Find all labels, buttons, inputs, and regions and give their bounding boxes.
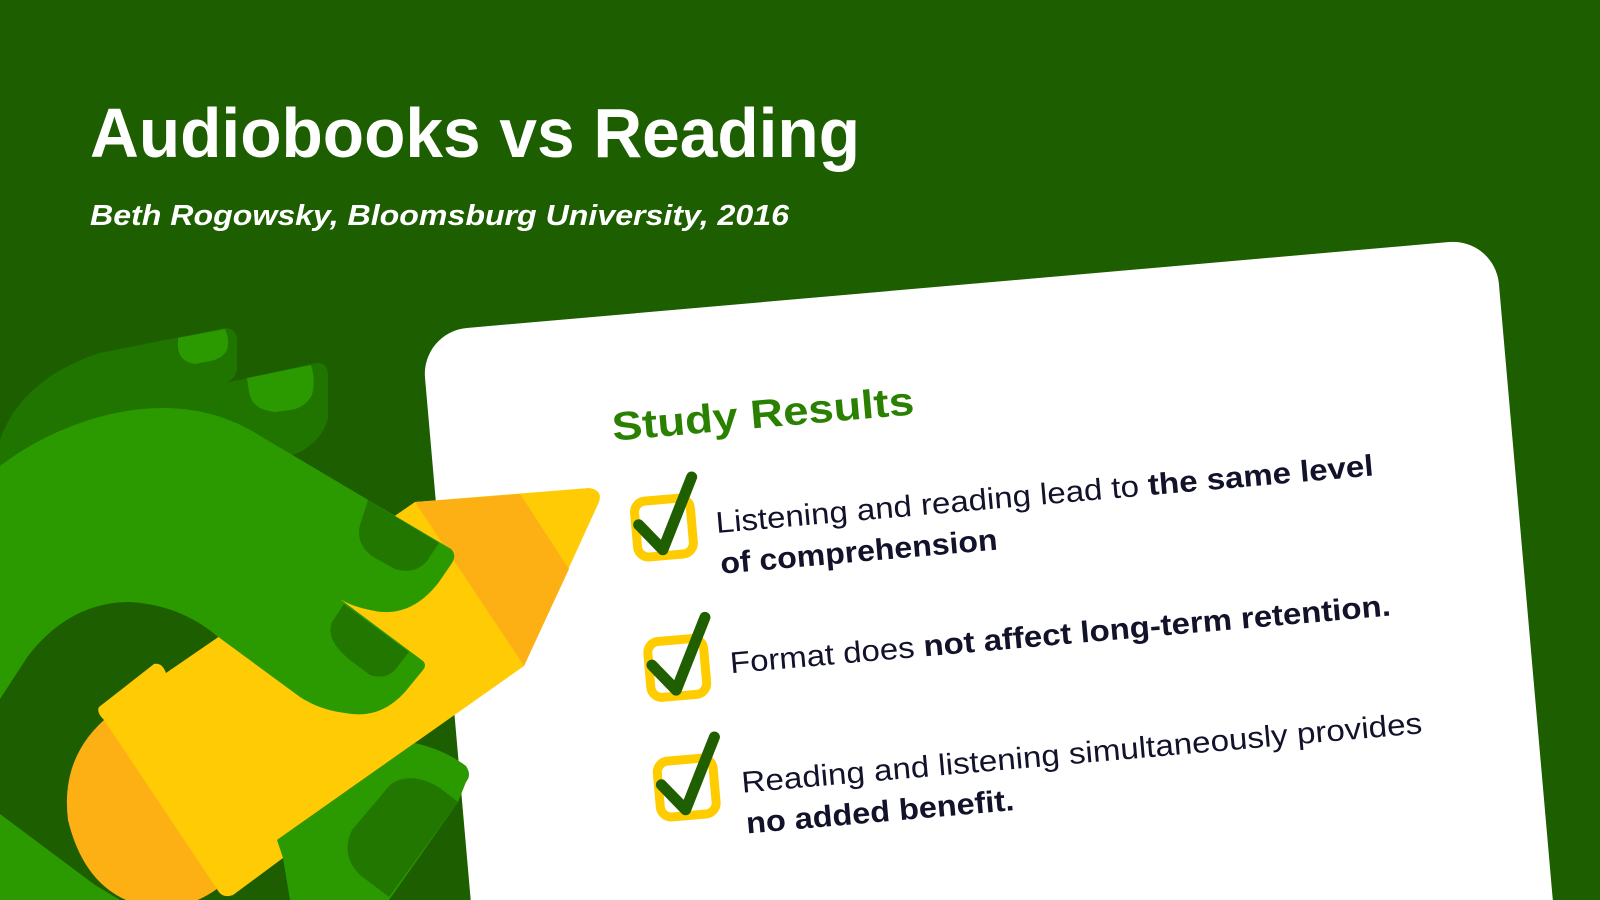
- item 1: [630, 454, 1372, 574]
- item 2: [643, 598, 1390, 702]
- item 3: [652, 714, 1422, 834]
- subtitle: Beth Rogowsky, Bloomsburg University, 2016: [90, 200, 790, 232]
- pencil body: [98, 488, 600, 896]
- lower finger: [277, 743, 469, 900]
- item 3: Reading and listening simultaneously provides: [740, 707, 1423, 800]
- item 1: Listening and reading lead to the same level: [714, 450, 1375, 540]
- lower palm: [0, 814, 120, 900]
- illustration: hand holding pencil: [0, 328, 600, 900]
- eraser: [67, 715, 217, 900]
- pencil wood: [415, 494, 569, 666]
- item 3: no added benefit.: [745, 784, 1016, 840]
- panel: study results card: [421, 238, 1558, 900]
- item 2: Format does not affect long-term retention.: [729, 590, 1392, 680]
- title: Audiobooks vs Reading: [90, 94, 860, 172]
- main hand: [0, 408, 454, 714]
- finger shadows: [359, 500, 439, 571]
- card heading: Study Results: [610, 379, 916, 450]
- back nails: [178, 329, 228, 364]
- item 1: of comprehension: [719, 524, 999, 581]
- back fingers: [0, 328, 328, 466]
